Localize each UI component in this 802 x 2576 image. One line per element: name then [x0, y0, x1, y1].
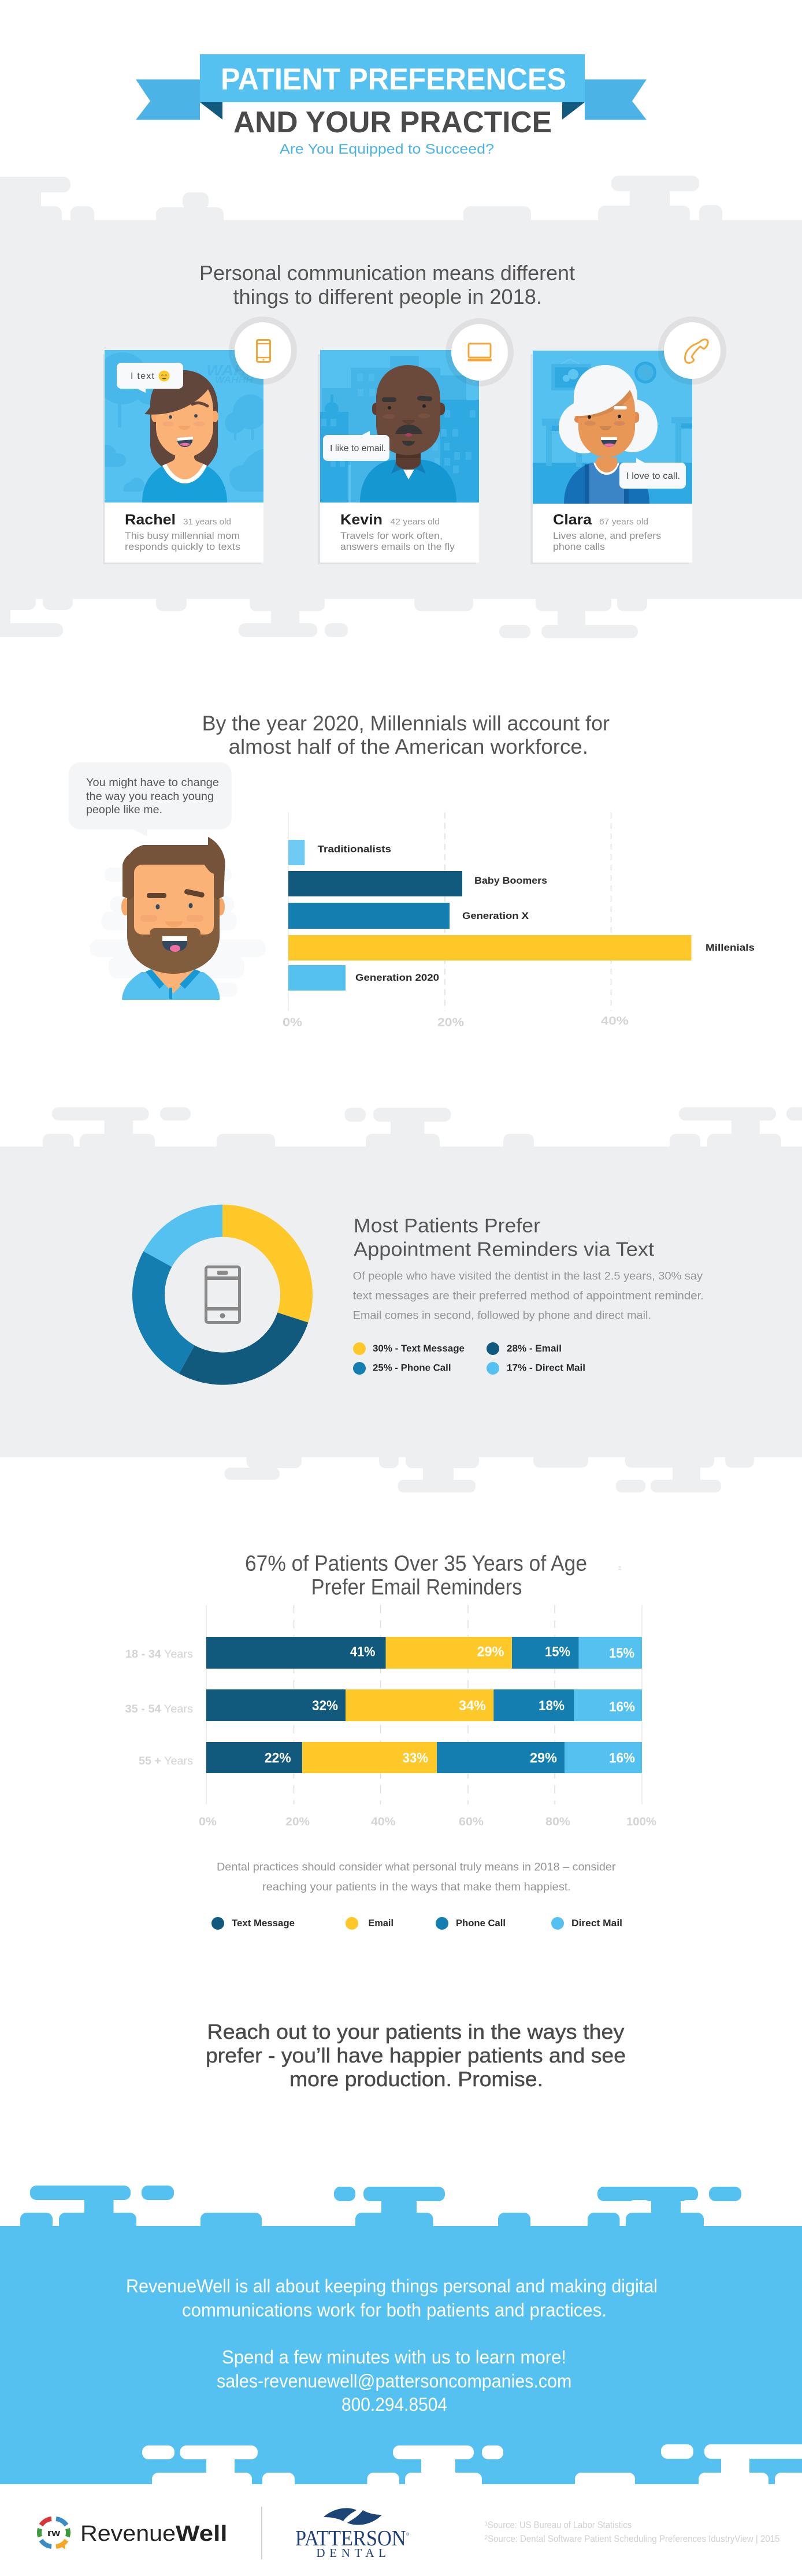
text block: call to action [126, 2276, 658, 2415]
closing statement: more production. Promise. [289, 2067, 543, 2091]
card text: Kevin: answers emails on the fly [340, 541, 455, 552]
text block: dental practices [217, 1861, 616, 1893]
donut chart [132, 1205, 313, 1385]
text block: most patients prefer: Appointment Reminders via Text [354, 1239, 655, 1261]
bars: 18-34 years: 29% [477, 1644, 504, 1660]
stacked bar chart: age groups: 18 - 34 Years [125, 1648, 193, 1661]
speech bubble: I text [117, 363, 183, 393]
card text: Rachel [125, 512, 240, 552]
card text: Clara: 67 years old [599, 517, 648, 527]
bars: 55+ years: 22% [265, 1751, 291, 1766]
stacked bar chart: age groups: 60% [459, 1816, 484, 1829]
logo: RevenueWell: Revenue [80, 2522, 176, 2546]
bars: 35-54 years: 18% [539, 1698, 565, 1714]
card text: Rachel: responds quickly to texts [125, 541, 240, 552]
bars: 18-34 years [206, 1637, 642, 1669]
card text: Clara: phone calls [553, 541, 605, 552]
icon: telephone badge [658, 317, 726, 385]
heading: email reminders: Prefer Email Reminders [311, 1576, 522, 1600]
donut legend: 28% - Email [507, 1343, 562, 1354]
heading: millennials: almost half of the American workforce. [229, 735, 588, 758]
title banner: Are You Equipped to Succeed? [280, 142, 494, 157]
icon: smartphone in donut [205, 1265, 241, 1324]
text block: call to action: RevenueWell is all about keeping things personal and making digital [126, 2276, 658, 2296]
card text: Kevin: 42 years old [391, 517, 440, 527]
closing statement: Reach out to your patients in the ways they [207, 2020, 624, 2043]
bars: 35-54 years [206, 1689, 642, 1721]
title banner [136, 54, 647, 157]
icon: laptop badge [445, 318, 514, 386]
heading: email reminders: 2 [618, 1566, 621, 1571]
speech bubble: I love to call [619, 458, 686, 489]
card text: Rachel: 31 years old [183, 517, 231, 527]
text block: most patients prefer: Email comes in second, followed by phone and direct mail. [353, 1310, 651, 1322]
speech bubble: I like to email [323, 431, 389, 461]
logo: RevenueWell: Well [176, 2522, 228, 2546]
stacked bar chart: age groups: 40% [371, 1816, 396, 1829]
text block: dental practices: Dental practices should consider what personal truly means in 2018 – consider [217, 1861, 616, 1874]
stacked bar chart: age groups: 0% [199, 1816, 217, 1829]
stacked bar legend: Email [369, 1918, 393, 1929]
speech bubble: I love to call: I love to call. [626, 471, 680, 481]
text block: call to action: communications work for both patients and practices. [182, 2300, 607, 2321]
bar chart: workforce generations: Baby Boomers [474, 875, 547, 886]
heading: email reminders: 67% of Patients Over 35 Years of Age [245, 1552, 587, 1576]
title banner: PATIENT PREFERENCES [221, 62, 566, 96]
panel: call to action [0, 2186, 802, 2496]
logo: Patterson Dental: PATTERSON [295, 2526, 406, 2551]
closing statement [206, 2020, 626, 2091]
closing statement: prefer - you’ll have happier patients and see [206, 2043, 626, 2067]
heading: personal communication: Personal communication means different [199, 261, 575, 285]
card text: Kevin: Travels for work often, [340, 530, 443, 541]
text block: call to action: Spend a few minutes with us to learn more! [222, 2347, 566, 2367]
stacked bar legend [211, 1917, 622, 1930]
bars: 55+ years: 29% [530, 1751, 557, 1766]
heading: email reminders [245, 1552, 621, 1600]
logo: Patterson Dental: ® [406, 2532, 410, 2537]
donut legend: 17% - Direct Mail [507, 1363, 585, 1373]
card text: Clara: Lives alone, and prefers [553, 530, 661, 541]
donut legend: 25% - Phone Call [373, 1363, 451, 1373]
figure: Rachel [142, 370, 227, 502]
card: Rachel [96, 350, 268, 564]
bars: 18-34 years: 41% [350, 1644, 376, 1660]
card text: Kevin [340, 512, 455, 552]
stacked bar legend: Direct Mail [571, 1918, 622, 1929]
logo: RevenueWell [39, 2519, 228, 2549]
stacked bar chart: age groups: 80% [545, 1816, 570, 1829]
speech bubble: young people: You might have to change [86, 777, 219, 789]
speech bubble: I like to email: I like to email. [330, 444, 386, 453]
card: Rachel: WAHHH [215, 374, 254, 385]
panel: appointment reminders [0, 1107, 802, 1492]
title banner: AND YOUR PRACTICE [233, 106, 552, 139]
stacked bar chart: age groups: 55 + Years [139, 1755, 193, 1767]
speech bubble: young people [69, 762, 232, 836]
bars: 55+ years: 16% [609, 1751, 635, 1766]
bar chart: workforce generations: Generation X [462, 910, 529, 921]
speech bubble: young people: the way you reach young [86, 791, 214, 803]
bars: 35-54 years: 34% [459, 1698, 486, 1714]
source notes: ¹Source: US Bureau of Labor Statistics [485, 2519, 632, 2530]
bar chart: workforce generations: 40% [601, 1015, 629, 1028]
card: Rachel: WAHH [206, 362, 259, 379]
text block: most patients prefer: Most Patients Prefer [354, 1215, 540, 1237]
speech bubble: I text: I text [131, 371, 155, 381]
heading: personal communication [199, 261, 575, 308]
stacked bar legend: Phone Call [456, 1918, 506, 1929]
text block: call to action: 800.294.8504 [341, 2394, 447, 2415]
speech bubble: young people: people like me. [86, 804, 162, 816]
stacked bar chart: age groups: 20% [285, 1816, 310, 1829]
card: Clara [530, 351, 692, 564]
text block: dental practices: reaching your patients in the ways that make them happiest. [262, 1881, 571, 1893]
stacked bar chart: age groups: 35 - 54 Years [125, 1703, 193, 1715]
text block: most patients prefer: text messages are their preferred method of appointment reminder. [353, 1290, 704, 1302]
bar chart: workforce generations: Millenials [706, 942, 755, 953]
heading: millennials: By the year 2020, Millennials will account for [202, 712, 610, 735]
figure: bearded millennial [90, 837, 266, 1000]
heading: personal communication: things to different people in 2018. [233, 285, 542, 308]
card: Kevin [318, 350, 479, 564]
heading: millennials [202, 712, 610, 758]
text block: most patients prefer [353, 1215, 704, 1322]
figure: Clara [559, 365, 658, 504]
card text: Kevin: Kevin [340, 512, 383, 528]
bar chart: workforce generations: Generation 2020 [355, 972, 439, 983]
icon: smartphone badge [229, 317, 297, 385]
bars: 35-54 years: 32% [312, 1698, 338, 1714]
text block: call to action: sales-revenuewell@pattersoncompanies.com [217, 2371, 571, 2392]
card text: Rachel: Rachel [125, 512, 176, 528]
bar chart: workforce generations: 0% [283, 1017, 302, 1029]
bar chart: workforce generations [283, 813, 755, 1029]
bar chart: workforce generations: Traditionalists [318, 844, 391, 855]
bars: 55+ years: 33% [402, 1751, 428, 1766]
bars: 18-34 years: 15% [609, 1646, 634, 1661]
logo: Patterson Dental [295, 2508, 410, 2560]
logo: RevenueWell: rw [47, 2527, 61, 2538]
card text: Clara: Clara [553, 512, 592, 528]
stacked bar chart: age groups: 100% [626, 1816, 656, 1829]
card text: Clara [553, 512, 661, 552]
stacked bar chart: age groups [125, 1605, 656, 1829]
bars: 35-54 years: 16% [609, 1699, 635, 1715]
logo: Patterson Dental: DENTAL [316, 2546, 386, 2560]
bars: 18-34 years: 15% [545, 1644, 570, 1660]
text block: most patients prefer: Of people who have visited the dentist in the last 2.5 years, 30% say [353, 1271, 703, 1283]
figure: Kevin [360, 365, 456, 502]
stacked bar legend: Text Message [232, 1918, 295, 1929]
source notes [485, 2519, 780, 2544]
donut legend [353, 1342, 585, 1375]
panel: personal communication [0, 176, 802, 638]
bar chart: workforce generations: 20% [437, 1017, 464, 1029]
donut legend: 30% - Text Message [373, 1343, 465, 1354]
card text: Rachel: This busy millennial mom [125, 530, 240, 541]
text block: most patients prefer: 1 [628, 1237, 630, 1242]
bars: 55+ years [206, 1742, 642, 1773]
